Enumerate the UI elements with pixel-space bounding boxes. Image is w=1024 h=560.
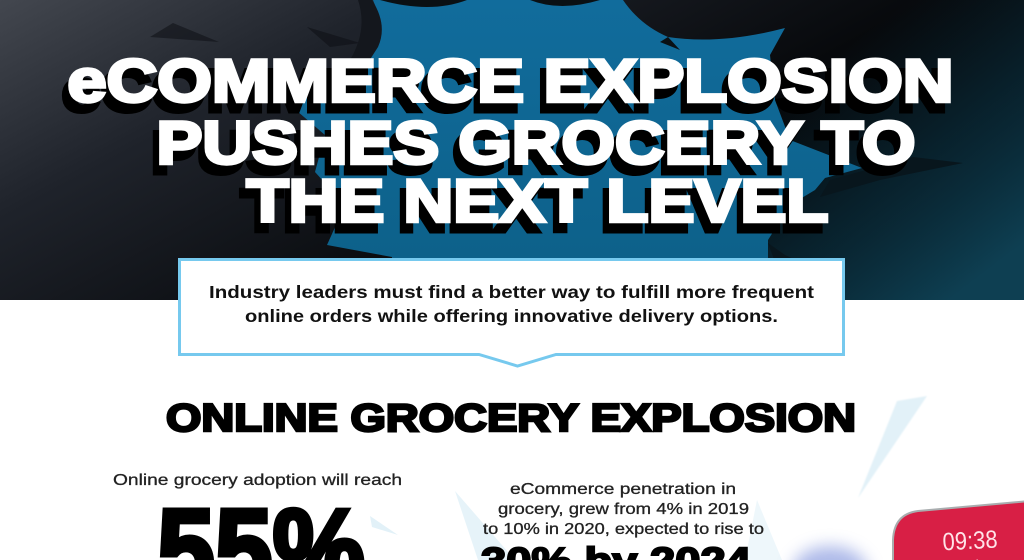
title	[62, 48, 954, 244]
stat label: Online grocery adoption will reach	[113, 472, 402, 489]
phone body	[893, 501, 1024, 560]
light blue shards	[370, 396, 927, 560]
phone	[893, 501, 1024, 560]
stat: eCommerce penetration	[481, 481, 764, 560]
title shadow	[62, 58, 948, 244]
header background	[0, 0, 1024, 300]
blue explosion burst	[290, 0, 862, 300]
section heading: ONLINE GROCERY EXPLOSION	[166, 397, 856, 440]
title text	[68, 48, 954, 234]
penetration text: to 10% in 2020, expected to rise to	[483, 521, 764, 538]
callout text: Industry leaders must find a better way to fulfill more frequent	[209, 282, 814, 302]
penetration text: eCommerce penetration in	[510, 481, 736, 498]
callout	[180, 260, 844, 366]
callout text: online orders while offering innovative delivery options.	[245, 306, 778, 326]
dark burst swirls	[350, 0, 963, 262]
blue cloud	[792, 546, 868, 560]
title shadow: THE NEXT LEVEL	[240, 178, 822, 244]
callout text	[209, 282, 814, 326]
phone clock: 09:38	[942, 526, 998, 556]
title shadow: eCOMMERCE EXPLOSION	[62, 58, 948, 124]
title shadow: PUSHES GROCERY TO	[150, 120, 909, 186]
title text: THE NEXT LEVEL	[246, 168, 828, 234]
title text: PUSHES GROCERY TO	[156, 110, 915, 176]
penetration text: grocery, grew from 4% in 2019	[498, 501, 749, 518]
penetration text	[483, 481, 764, 538]
stat: online grocery adoption	[113, 472, 402, 560]
title text: eCOMMERCE EXPLOSION	[68, 48, 954, 114]
